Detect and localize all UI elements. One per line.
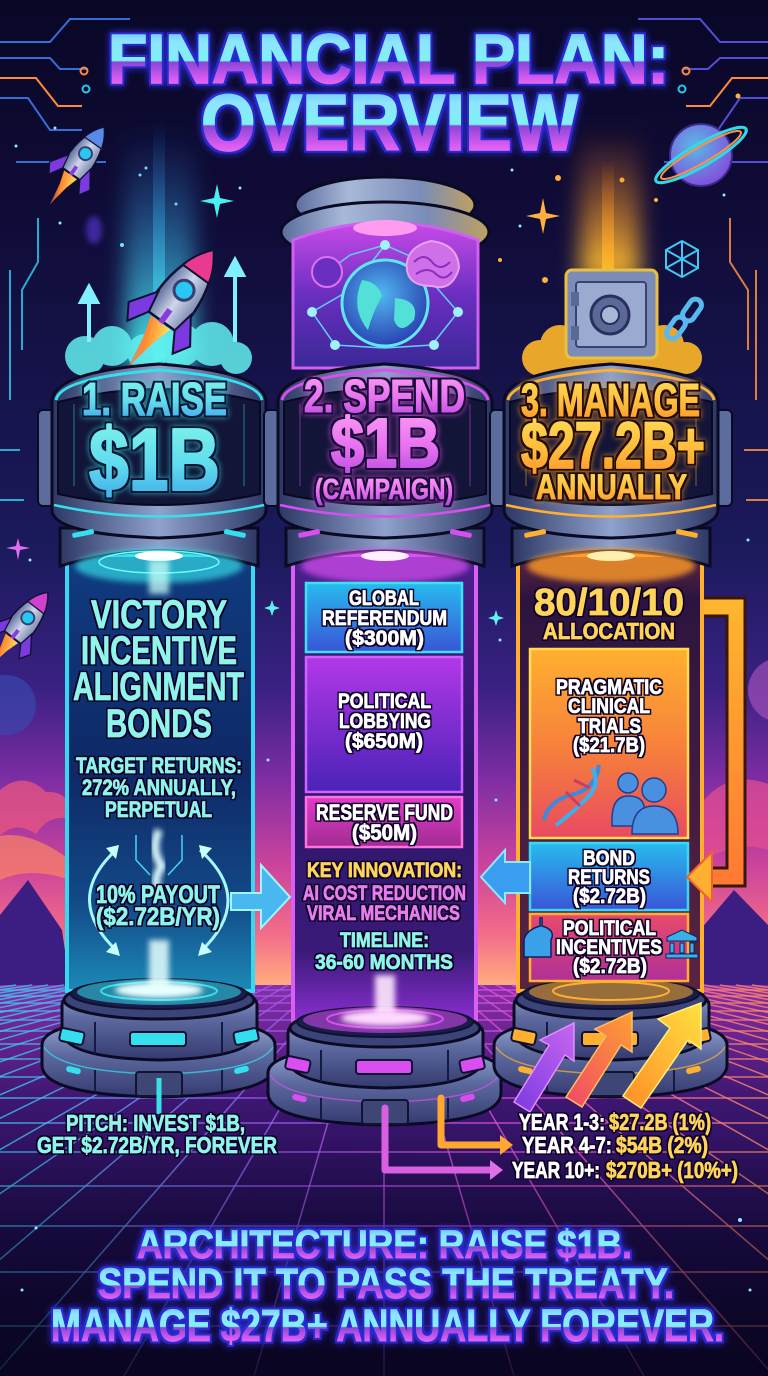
arrow: yellow up arrow [623, 1003, 701, 1108]
text: key innovation: VIRAL MECHANICS [307, 902, 460, 925]
box: global referendum [306, 583, 462, 652]
text: pitch: PITCH: INVEST $1B, [66, 1110, 245, 1136]
icon: bank [666, 930, 698, 958]
icon: chain link [664, 297, 704, 341]
arrow: bond returns to column 2 [481, 850, 530, 903]
heading: 1. raise $1B [82, 373, 227, 509]
text: target returns: TARGET RETURNS: [76, 753, 242, 778]
icon: dna helix [544, 765, 599, 825]
text: 10% payout: 10% PAYOUT [96, 881, 220, 909]
column 1: raise [38, 228, 280, 1097]
text: pitch: GET $2.72B/YR, FOREVER [37, 1132, 277, 1158]
icon: safe vault [566, 270, 657, 358]
connector: column 1 to pitch [156, 1078, 162, 1114]
text: target returns [76, 753, 242, 822]
title [108, 20, 669, 167]
column 2: spend [264, 177, 506, 1125]
cap with heading [38, 364, 280, 566]
icon: glowing cloud [522, 325, 702, 376]
base pedestal [494, 979, 727, 1097]
cap with heading [490, 364, 732, 566]
box: reserve fund [306, 797, 462, 847]
text: 10% payout [96, 881, 220, 931]
text: 80/10/10 allocation [534, 582, 684, 644]
text: yearly milestones: YEAR 1-3: [519, 1109, 605, 1135]
column 3: manage [490, 241, 732, 1097]
heading: 2. spend $1B (campaign): $1B [331, 404, 440, 482]
arrow: orange up arrow [566, 1012, 632, 1107]
title: FINANCIAL PLAN: [108, 20, 669, 98]
box: global referendum: ($300M) [345, 627, 424, 650]
box: reserve fund: RESERVE FUND [316, 800, 453, 825]
box: bond returns: BOND [583, 847, 635, 870]
box: political incentives [524, 914, 698, 981]
arrow: purple up arrow [514, 1023, 574, 1112]
box: pragmatic clinical trials [530, 649, 688, 838]
text: key innovation: AI COST REDUCTION [303, 882, 466, 905]
heading: 2. spend $1B (campaign): (CAMPAIGN) [315, 474, 453, 506]
icon: crypto hexagon [666, 241, 698, 277]
text: yearly milestones: YEAR 4-7: [522, 1132, 612, 1158]
tube title: victory incentive alignment bonds: INCENTIVE [81, 629, 237, 673]
arrow: amber connector to year 4-7 [441, 1098, 513, 1155]
text: 80/10/10 allocation: ALLOCATION [543, 618, 675, 644]
text: key innovation: KEY INNOVATION: [307, 859, 462, 882]
box: political lobbying: LOBBYING [339, 710, 431, 733]
text: yearly milestones: $27.2B (1%) [609, 1109, 711, 1135]
base pedestal [268, 1007, 501, 1125]
text: timeline: TIMELINE: [340, 929, 429, 952]
box: political lobbying: ($650M) [345, 730, 423, 753]
box: bond returns: ($2.72B) [573, 885, 646, 908]
dome glass [293, 222, 478, 368]
box: reserve fund: ($50M) [352, 820, 417, 845]
icon: capitol [524, 918, 552, 957]
text: yearly milestones: $54B (2%) [616, 1132, 708, 1158]
heading: 1. raise $1B: 1. RAISE [82, 373, 227, 425]
heading: 3. manage $27.2B+ annually [521, 374, 705, 507]
box: pragmatic clinical trials: CLINICAL [568, 695, 650, 718]
heading: 2. spend $1B (campaign): 2. SPEND [304, 370, 465, 422]
bottom tube glow [341, 975, 429, 1026]
dome lid [281, 177, 489, 262]
box: global referendum: REFERENDUM [322, 607, 447, 630]
tube [293, 555, 476, 1021]
dome glow [353, 220, 417, 236]
text: 10% payout: ($2.72B/YR) [96, 903, 220, 931]
text: target returns: PERPETUAL [105, 797, 212, 822]
box: global referendum: GLOBAL [349, 587, 419, 610]
box: pragmatic clinical trials: PRAGMATIC [556, 676, 662, 699]
icon: payout loop arrows and energy core [89, 830, 228, 990]
text: yearly milestones: YEAR 10+: [512, 1157, 600, 1183]
heading: 2. spend $1B (campaign) [304, 370, 465, 506]
box: political incentives: INCENTIVES [556, 936, 662, 959]
icon: small rocket top left [29, 113, 124, 219]
top tube glow [301, 549, 469, 583]
box: bond returns [530, 843, 688, 910]
background sky gradient [0, 0, 768, 985]
base pedestal [42, 979, 275, 1097]
icon: network globe and brain [307, 240, 463, 350]
box: political lobbying [306, 657, 462, 792]
text: key innovation [303, 859, 466, 925]
text: 80/10/10 allocation: 80/10/10 [534, 582, 684, 624]
text: pitch [37, 1110, 277, 1158]
background: sunset clouds, mountains and planets [0, 658, 768, 985]
tube title: victory incentive alignment bonds: BONDS [106, 702, 212, 746]
box: bond returns: RETURNS [568, 866, 650, 889]
background: circuit traces [0, 19, 768, 500]
background: cyan light beam behind column 1 [125, 120, 195, 370]
text: yearly milestones [512, 1109, 738, 1183]
icon: launch cloud [65, 322, 252, 376]
box: political lobbying: POLITICAL [338, 690, 431, 713]
tube [67, 555, 253, 991]
footer summary [51, 1223, 724, 1351]
box: political incentives: POLITICAL [563, 917, 656, 940]
tube [518, 555, 702, 991]
tube title: victory incentive alignment bonds [73, 593, 244, 746]
tube title: victory incentive alignment bonds: ALIGNMENT [73, 665, 244, 709]
icon: upward arrows [81, 260, 243, 342]
text: timeline: 36-60 MONTHS [315, 951, 453, 974]
top tube glow [75, 549, 243, 594]
top tube glow [527, 549, 695, 583]
footer summary: SPEND IT TO PASS THE TREATY. [98, 1260, 674, 1308]
heading: 1. raise $1B: $1B [89, 410, 220, 509]
arrow: pink connector to year 10+ [385, 1108, 503, 1180]
arrow: orange return loop [687, 607, 736, 902]
icon: rocket at left edge [0, 577, 67, 682]
tube title: victory incentive alignment bonds: VICTORY [91, 593, 227, 637]
box: pragmatic clinical trials: TRIALS [578, 715, 641, 738]
text: target returns: 272% ANNUALLY, [82, 775, 236, 800]
cap with heading [264, 364, 506, 566]
footer summary: ARCHITECTURE: RAISE $1B. [137, 1223, 632, 1267]
background: synthwave perspective grid floor [0, 985, 768, 1376]
text: timeline [315, 929, 453, 974]
heading: 3. manage $27.2B+ annually: $27.2B+ [521, 408, 705, 482]
text: yearly milestones: $270B+ (10%+) [606, 1157, 738, 1183]
icon: main rocket [97, 228, 244, 390]
background: amber light beam behind column 3 [580, 130, 640, 280]
title: OVERVIEW [201, 78, 578, 167]
box: political incentives: ($2.72B) [573, 955, 647, 978]
heading: 3. manage $27.2B+ annually: ANNUALLY [536, 468, 687, 507]
icon: ringed planet top right [650, 119, 752, 191]
arrow: column 1 to column 2 [231, 865, 290, 928]
box: pragmatic clinical trials: ($21.7B) [573, 734, 645, 757]
bottom tube glow [115, 982, 203, 998]
icon: people [612, 773, 678, 834]
